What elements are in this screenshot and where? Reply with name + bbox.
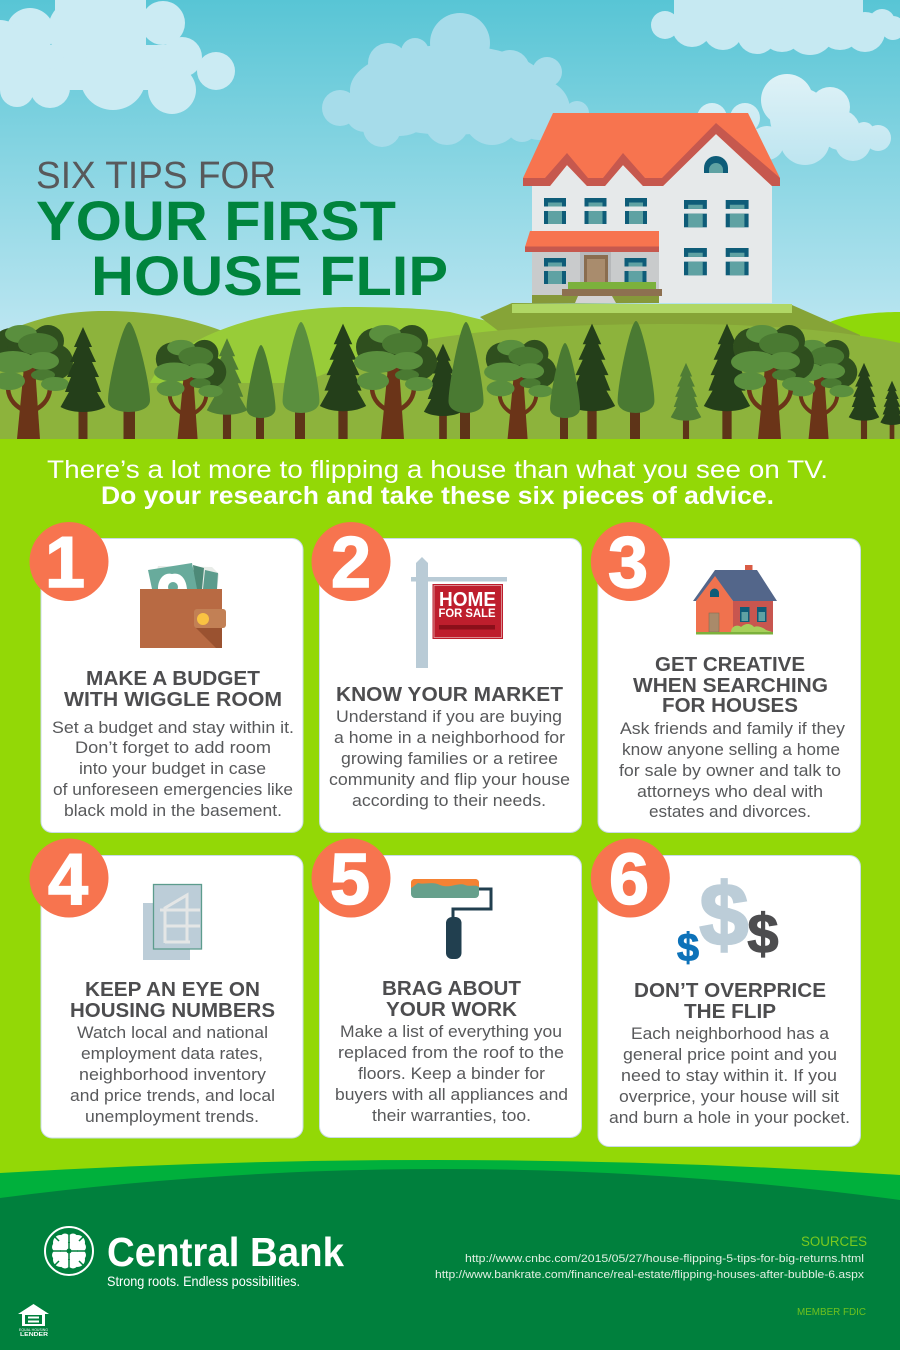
cloud: top right <box>651 0 900 55</box>
badge 5 <box>312 838 390 920</box>
body text: their warranties, too. <box>372 1107 531 1125</box>
panel: tip 6 don't overprice the flip <box>591 838 860 1146</box>
heading: BRAG ABOUT <box>382 978 521 1000</box>
badge 4: 4 <box>48 840 88 920</box>
intro text: Do your research and take these six pieces of advice. <box>101 482 774 510</box>
body text: estates and divorces. <box>649 803 811 821</box>
sources: http://www.bankrate.com/finance/real-estate/flipping-houses-after-bubble-6.aspx <box>435 1269 865 1281</box>
icon: dollar signs: $ <box>677 926 699 970</box>
body text: need to stay within it. If you <box>621 1067 837 1085</box>
logo: Central Bank <box>45 1227 344 1289</box>
title: YOUR FIRST <box>36 189 396 252</box>
icon: home for sale sign: FOR SALE <box>438 608 496 620</box>
heading: YOUR WORK <box>386 999 518 1021</box>
heading: DON’T OVERPRICE <box>634 980 826 1002</box>
icon: clover emblem <box>45 1227 93 1275</box>
icon: equal housing lender <box>18 1304 49 1338</box>
icon: dollar signs: $ <box>747 902 779 965</box>
icon: dollar signs <box>677 865 779 970</box>
intro text: There’s a lot more to flipping a house than what you see on TV. <box>47 456 828 484</box>
body text: Ask friends and family if they <box>620 720 846 738</box>
sky <box>0 0 900 335</box>
roof <box>523 113 780 186</box>
house body <box>532 134 772 303</box>
house <box>512 113 792 313</box>
panel: tip 3 get creative <box>591 522 860 832</box>
panel: tip 1 make a budget <box>30 522 303 832</box>
body text: of unforeseen emergencies like <box>53 781 293 799</box>
icon: home for sale sign: HOME <box>439 589 496 611</box>
body text <box>609 1025 850 1127</box>
body text <box>329 708 570 810</box>
logo: Central Bank: Central Bank <box>107 1229 344 1275</box>
body text: black mold in the basement. <box>64 802 282 820</box>
heading: HOUSING NUMBERS <box>70 1000 275 1022</box>
body text: neighborhood inventory <box>79 1066 267 1084</box>
heading: MAKE A BUDGET <box>86 668 260 690</box>
body text: Set a budget and stay within it. <box>52 719 294 737</box>
icon: paint roller <box>411 879 491 959</box>
arched attic window <box>704 156 728 173</box>
body text: unemployment trends. <box>85 1108 259 1126</box>
body text: a home in a neighborhood for <box>334 729 566 747</box>
body text: floors. Keep a binder for <box>358 1065 546 1083</box>
heading <box>64 668 282 711</box>
badge 1 <box>30 522 108 603</box>
title <box>36 155 448 307</box>
body text: Make a list of everything you <box>340 1023 562 1041</box>
body text: replaced from the roof to the <box>338 1044 564 1062</box>
badge 5: 5 <box>330 840 370 920</box>
body text: growing families or a retiree <box>341 750 558 768</box>
badge 2: 2 <box>331 523 371 603</box>
icon: wallet with money <box>140 563 226 648</box>
badge 1: 1 <box>45 523 85 603</box>
sources <box>435 1234 867 1281</box>
badge 6 <box>591 838 670 920</box>
body text <box>52 719 294 820</box>
title: SIX TIPS FOR <box>36 155 276 197</box>
heading: KNOW YOUR MARKET <box>336 684 563 706</box>
badge 3: 3 <box>608 523 648 603</box>
body text: Each neighborhood has a <box>631 1025 830 1043</box>
roof trim <box>523 123 780 186</box>
badge 3 <box>591 522 670 603</box>
logo: Central Bank: Strong roots. Endless possibilities. <box>107 1273 300 1289</box>
icon: equal housing lender: LENDER <box>20 1332 48 1338</box>
body text: Watch local and national <box>77 1024 268 1042</box>
body text: according to their needs. <box>352 792 546 810</box>
body text: and burn a hole in your pocket. <box>609 1109 850 1127</box>
heading <box>633 654 828 717</box>
heading <box>70 979 275 1022</box>
tree row <box>0 321 900 439</box>
member FDIC: MEMBER FDIC <box>797 1307 866 1318</box>
body text: for sale by owner and talk to <box>619 762 841 780</box>
cloud: middle behind house <box>322 13 589 147</box>
body text: attorneys who deal with <box>637 783 823 801</box>
heading: WHEN SEARCHING <box>633 675 828 697</box>
heading <box>382 978 521 1021</box>
heading: KEEP AN EYE ON <box>85 979 260 1001</box>
cloud: top left <box>0 0 235 114</box>
body text: know anyone selling a home <box>622 741 840 759</box>
icon: equal housing lender: EQUAL HOUSING <box>19 1327 48 1332</box>
body text: community and flip your house <box>329 771 570 789</box>
body text: Understand if you are buying <box>336 708 562 726</box>
body text: Don’t forget to add room <box>75 739 271 757</box>
badge 6: 6 <box>609 840 649 920</box>
body text: into your budget in case <box>79 760 266 778</box>
sources: SOURCES <box>801 1234 867 1249</box>
body text: and price trends, and local <box>70 1087 275 1105</box>
platform <box>512 304 792 313</box>
ground floor <box>532 252 662 303</box>
heading: WITH WIGGLE ROOM <box>64 689 282 711</box>
heading: FOR HOUSES <box>662 695 798 717</box>
landscape: hills <box>0 303 900 439</box>
heading <box>634 980 826 1023</box>
icon: small house <box>693 565 777 634</box>
heading: GET CREATIVE <box>655 654 805 676</box>
panel: tip 2 know your market <box>312 522 582 832</box>
panel: tip 4 keep an eye on housing numbers <box>30 838 303 1138</box>
cloud: right of house <box>697 74 891 165</box>
icon: home for sale sign <box>411 557 507 668</box>
body text: overprice, your house will sit <box>619 1088 839 1106</box>
title: HOUSE FLIP <box>91 244 448 307</box>
body text <box>335 1023 568 1125</box>
footer <box>0 1160 900 1350</box>
body text: buyers with all appliances and <box>335 1086 568 1104</box>
panel: tip 5 brag about your work <box>312 838 582 1138</box>
icon: documents with blueprint <box>143 884 202 960</box>
windows <box>544 198 749 275</box>
body text <box>619 720 846 821</box>
icon: dollar signs: $ <box>700 865 748 964</box>
intro text <box>47 456 828 510</box>
body text: general price point and you <box>623 1046 837 1064</box>
sources: http://www.cnbc.com/2015/05/27/house-flipping-5-tips-for-big-returns.html <box>465 1253 864 1265</box>
badge 4 <box>30 838 108 920</box>
body text <box>70 1024 275 1126</box>
body text: employment data rates, <box>81 1045 263 1063</box>
heading: THE FLIP <box>684 1001 776 1023</box>
porch roof <box>525 231 659 252</box>
badge 2 <box>312 522 390 603</box>
